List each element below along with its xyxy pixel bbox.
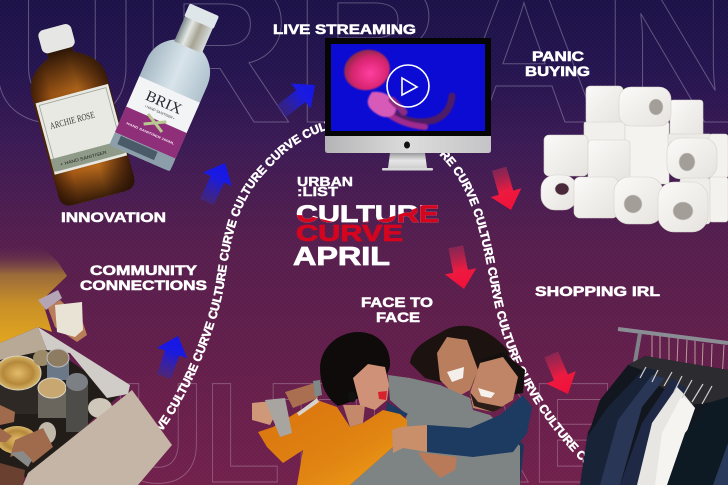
label: community connections xyxy=(80,262,207,293)
skin behind arm xyxy=(285,383,318,408)
jellyfish image xyxy=(340,45,452,127)
white shirt one xyxy=(637,387,695,485)
monitor screen xyxy=(331,44,485,131)
hand xyxy=(48,300,87,342)
icon: brix bottle: BRIX xyxy=(143,88,184,118)
left box wall xyxy=(0,327,47,360)
front man hair xyxy=(480,352,525,395)
dark jacket xyxy=(588,365,642,435)
back man mouth xyxy=(447,367,464,382)
arrow: red to face to face xyxy=(440,244,480,292)
monitor chin xyxy=(325,134,491,153)
white shirt two xyxy=(655,395,695,485)
navy jacket three xyxy=(620,378,688,485)
apple logo xyxy=(404,142,410,148)
garment base xyxy=(580,356,728,485)
icon: brix bottle: HAND SANITISER 100ML xyxy=(126,121,175,146)
back man face xyxy=(437,337,478,397)
monitor stand xyxy=(388,153,427,168)
navy arm xyxy=(427,395,532,457)
clothes rack xyxy=(580,329,728,485)
orange shirt xyxy=(258,400,407,485)
icon: desktop monitor xyxy=(325,38,491,170)
label: shopping irl: SHOPPING IRL xyxy=(535,283,661,299)
label: panic buying: PANIC xyxy=(532,48,584,64)
forearm xyxy=(0,463,25,485)
icon: toilet paper stack xyxy=(541,86,728,232)
front man mouth xyxy=(478,388,495,398)
watch xyxy=(10,451,32,467)
navy jacket one xyxy=(580,368,657,485)
icon: archie rose bottle xyxy=(16,17,137,208)
title: curve: CURVE xyxy=(296,220,403,246)
gray sweater xyxy=(350,375,520,485)
logo: urban list: :LIST xyxy=(297,184,338,199)
navy body xyxy=(512,440,524,485)
front man face xyxy=(470,357,518,412)
play button xyxy=(387,65,429,107)
navy behind woman xyxy=(386,402,408,420)
title: culture red swoosh overlay: CULTURE xyxy=(296,201,439,228)
title block xyxy=(293,174,439,271)
arrow: red to panic buying xyxy=(484,164,526,214)
hand on arm xyxy=(392,425,427,453)
people hugging xyxy=(252,326,532,485)
woman neck xyxy=(343,405,365,427)
label: panic buying xyxy=(525,48,590,79)
person holding tape xyxy=(0,245,87,343)
arrow: red to shopping irl xyxy=(536,348,583,400)
icon: brix bottle: • HAND SANITISER • xyxy=(144,104,176,121)
tape roll xyxy=(55,302,83,337)
logo: urban list: URBAN xyxy=(297,174,353,189)
icon: archie rose bottle: ARCHIE ROSE xyxy=(49,111,96,132)
logo: urban list xyxy=(297,174,353,199)
woman lips xyxy=(378,391,387,400)
hangers xyxy=(652,335,724,380)
earring xyxy=(348,392,356,402)
yellow shirt xyxy=(0,245,67,343)
box front flap xyxy=(23,390,172,485)
label: community connections: CONNECTIONS xyxy=(80,277,207,293)
label: live streaming: LIVE STREAMING xyxy=(273,21,416,37)
label: innovation: INNOVATION xyxy=(61,209,166,225)
monitor bezel xyxy=(325,38,491,136)
label: community connections: COMMUNITY xyxy=(90,262,198,278)
rail and post xyxy=(618,329,728,362)
icon: brix bottle xyxy=(109,0,235,171)
hands reaching xyxy=(0,405,53,463)
dark shirts xyxy=(667,397,728,485)
culture curve text path: CURVE CULTURE CURVE CULTURE CURVE CULTURE CURVE CULTURE CURVE CULTURE CURVE CULTURE CURVE CULTURE CURVE CULTURE CURVE CULTURE xyxy=(158,122,585,464)
shirt cuff xyxy=(38,290,62,310)
glass and hands xyxy=(252,398,319,437)
label: face to face: FACE TO xyxy=(361,294,433,310)
icon: archie rose bottle: + HAND SANITISER xyxy=(60,149,108,167)
arrow: blue to innovation xyxy=(192,156,240,209)
label: face to face: FACE xyxy=(376,309,420,325)
title: culture: CULTURE xyxy=(296,201,439,228)
garment top band xyxy=(628,356,728,405)
cans xyxy=(0,349,112,454)
arrow: blue to live streaming xyxy=(271,72,325,124)
label: face to face xyxy=(361,294,433,325)
woman hair xyxy=(320,332,390,406)
label: panic buying: BUYING xyxy=(525,63,590,79)
skin below arm xyxy=(418,452,457,478)
navy jacket two xyxy=(600,375,665,485)
front man beard xyxy=(470,392,503,412)
back man hair xyxy=(410,326,510,385)
arrow: blue to community connections xyxy=(149,331,193,382)
box interior xyxy=(0,345,120,478)
inner box wall xyxy=(38,327,130,398)
title: april: APRIL xyxy=(293,243,390,271)
woman face xyxy=(353,364,389,410)
collars xyxy=(640,367,712,404)
box of canned food xyxy=(0,327,172,485)
gray sleeve behind woman xyxy=(313,380,322,397)
